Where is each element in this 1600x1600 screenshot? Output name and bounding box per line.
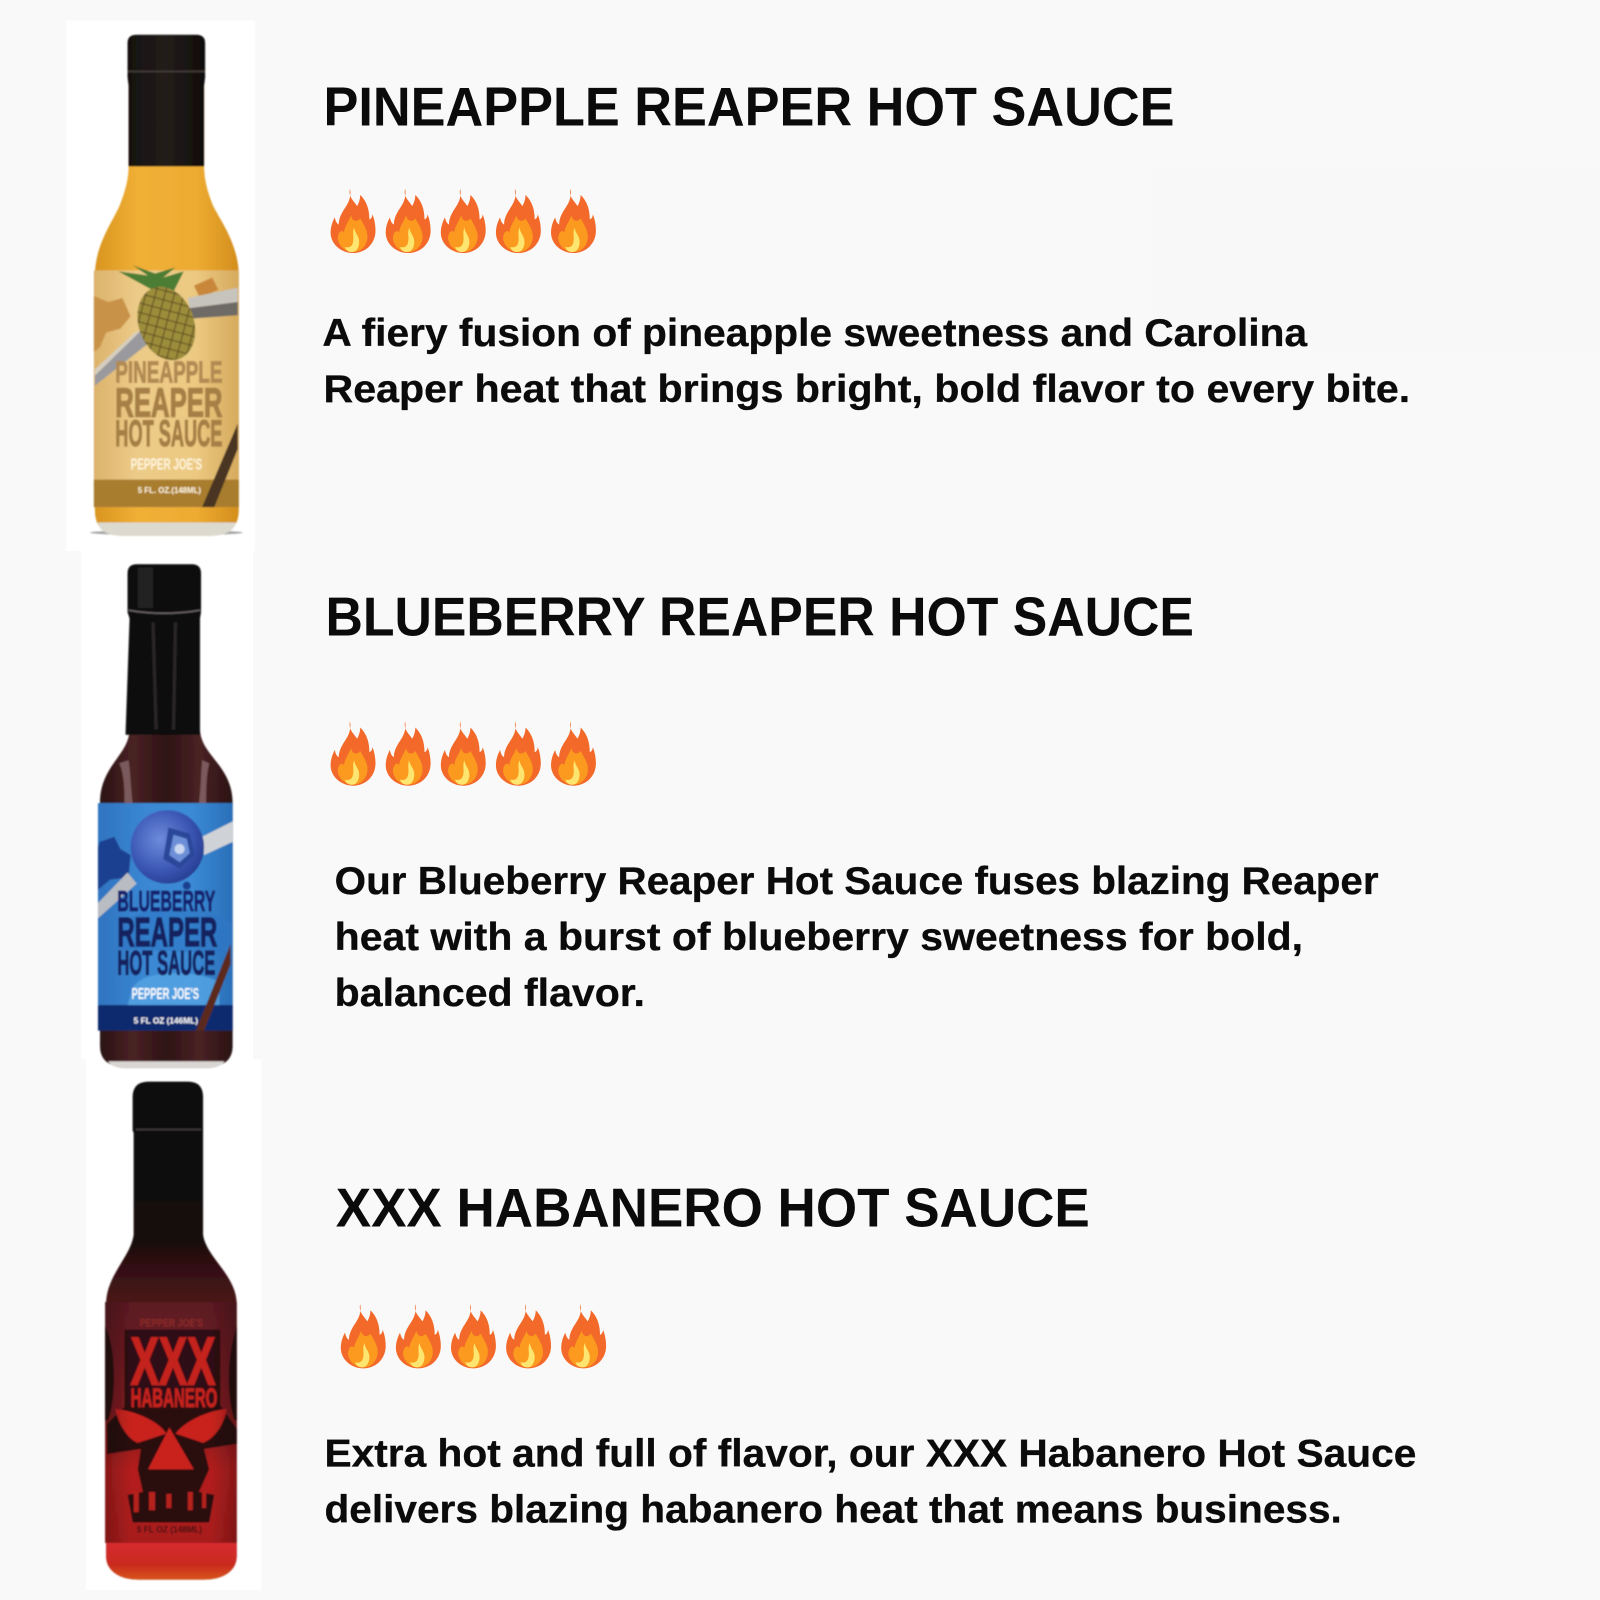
label title text: BLUEBERRY bbox=[117, 886, 215, 918]
heat rating: blueberry reaper bbox=[331, 721, 596, 786]
label title text: PINEAPPLE bbox=[115, 356, 222, 390]
description: pineapple reaper bbox=[322, 312, 1410, 411]
description: blueberry reaper: Our Blueberry Reaper Hot Sauce fuses blazing Reaper bbox=[335, 860, 1379, 903]
panel: blueberry reaper hot sauce bottle: 5 FL OZ (146ML) bbox=[134, 1016, 198, 1025]
description: pineapple reaper: A fiery fusion of pineapple sweetness and Carolina bbox=[322, 312, 1308, 355]
description: xxx habanero: delivers blazing habanero heat that means business. bbox=[324, 1488, 1342, 1531]
bottle neck and cap bbox=[126, 564, 201, 735]
heat rating: pineapple reaper bbox=[331, 189, 596, 253]
description: blueberry reaper: heat with a burst of blueberry sweetness for bold, bbox=[335, 916, 1303, 959]
panel: xxx habanero hot sauce bottle: HABANERO bbox=[131, 1383, 217, 1413]
panel: blueberry reaper hot sauce bottle bbox=[82, 551, 253, 1068]
panel: pineapple reaper hot sauce bottle: HOT SAUCE bbox=[115, 413, 222, 454]
highlights bbox=[119, 760, 133, 803]
panel: blueberry reaper hot sauce bottle: HOT SAUCE bbox=[117, 944, 215, 982]
knives bbox=[98, 872, 137, 918]
label background bbox=[94, 270, 239, 507]
label background bbox=[98, 803, 233, 1005]
panel: xxx habanero hot sauce bottle bbox=[86, 1059, 261, 1590]
panel: xxx habanero hot sauce bottle: 5 FL OZ (148ML) bbox=[137, 1525, 202, 1535]
label text: PEPPER JOE'S bbox=[140, 1318, 203, 1330]
cap bbox=[133, 1082, 203, 1137]
description: xxx habanero: Extra hot and full of flavor, our XXX Habanero Hot Sauce bbox=[324, 1432, 1416, 1475]
bottle neck and cap bbox=[128, 35, 205, 166]
heading: blueberry reaper: BLUEBERRY REAPER HOT SAUCE bbox=[326, 586, 1194, 648]
skull bbox=[124, 1330, 220, 1411]
panel: pineapple reaper hot sauce bottle bbox=[66, 20, 255, 551]
description: blueberry reaper: balanced flavor. bbox=[335, 972, 645, 1015]
panel: blueberry reaper hot sauce bottle: PEPPER JOE'S bbox=[132, 986, 199, 1003]
panel: pineapple reaper hot sauce bottle: PEPPER JOE'S bbox=[131, 456, 202, 473]
panel: blueberry reaper hot sauce bottle: REAPER bbox=[117, 909, 217, 955]
blueberry bbox=[131, 810, 204, 884]
description: blueberry reaper bbox=[335, 860, 1379, 1015]
heading: pineapple reaper: PINEAPPLE REAPER HOT SAUCE bbox=[323, 76, 1174, 138]
description: xxx habanero bbox=[324, 1432, 1416, 1531]
panel: pineapple reaper hot sauce bottle: REAPER bbox=[115, 379, 222, 425]
description: pineapple reaper: Reaper heat that brings bright, bold flavor to every bite. bbox=[323, 368, 1410, 411]
heading: xxx habanero: XXX HABANERO HOT SAUCE bbox=[336, 1177, 1090, 1239]
panel: xxx habanero hot sauce bottle: XXX bbox=[131, 1325, 215, 1400]
knife blades bbox=[95, 331, 149, 386]
pineapple bbox=[118, 265, 184, 298]
label background bbox=[105, 1302, 237, 1543]
bottle glass base bbox=[90, 530, 243, 535]
panel: pineapple reaper hot sauce bottle: 5 FL. OZ.(148ML) bbox=[138, 486, 201, 495]
heat rating: xxx habanero bbox=[341, 1304, 606, 1368]
